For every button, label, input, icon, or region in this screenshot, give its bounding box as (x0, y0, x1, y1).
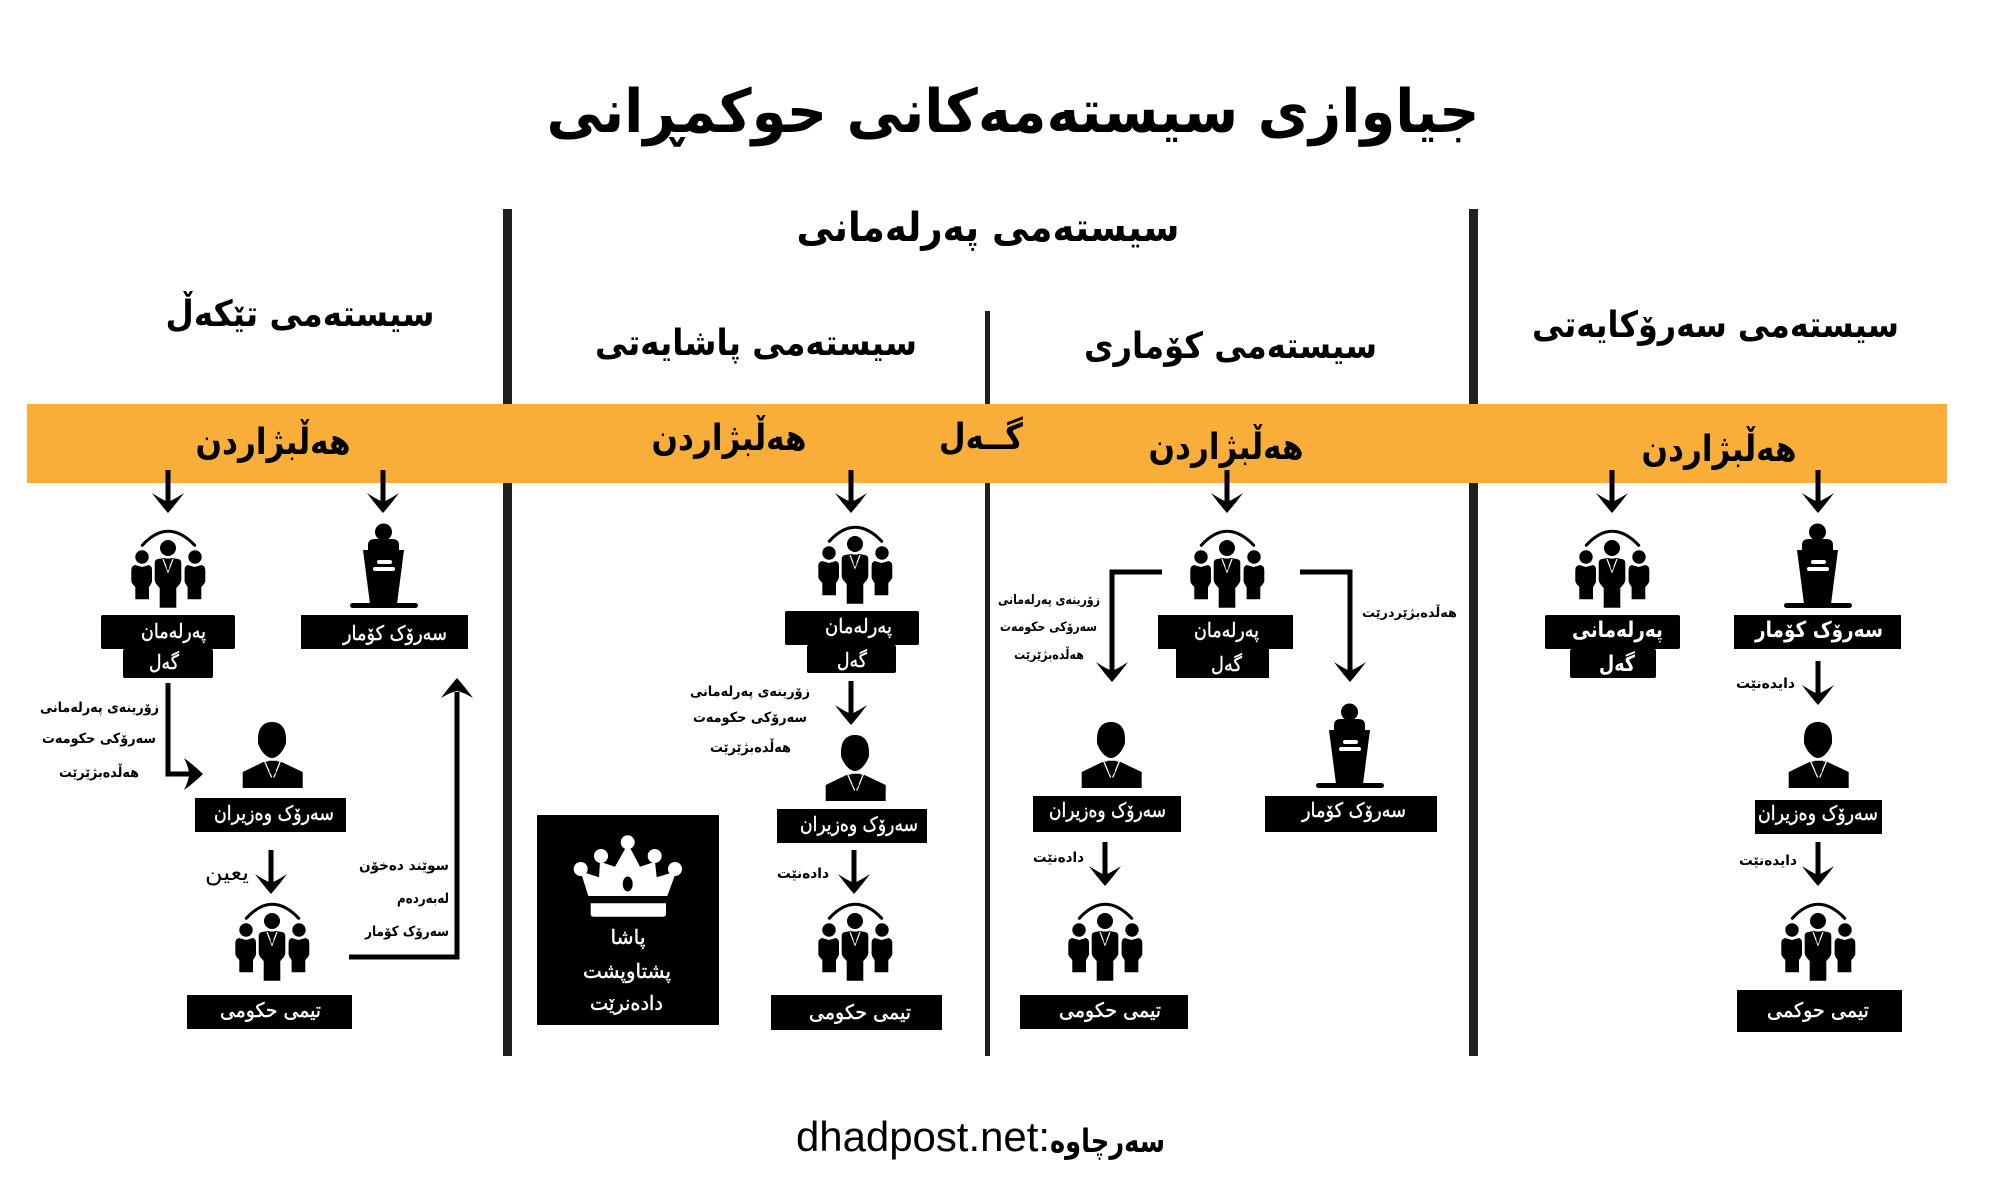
arrow: to president (1802, 470, 1834, 513)
arrow: prime minister to team (1802, 842, 1834, 886)
note: appoints: دایدەنێت (1736, 676, 1795, 692)
icon: government team (818, 904, 892, 981)
label box: parliament: گەل (1211, 652, 1242, 676)
heading: parliamentary system: سیستەمی پەرلەمانی (796, 205, 1180, 251)
panel: monarchy system (537, 323, 942, 1030)
icon: president at podium (1784, 524, 1852, 608)
note: majority elects prime minister: هەڵدەبژێرێت (710, 738, 791, 756)
king text: دادەنرێت (590, 991, 663, 1015)
note: majority elects prime minister (40, 700, 159, 781)
note: majority elects prime minister (690, 684, 810, 756)
band: people and elections (27, 404, 1947, 483)
arrow: to parliament (1596, 470, 1628, 513)
label box: parliament: پەرلەمانی (1572, 618, 1663, 643)
arrow: prime minister to team (838, 850, 870, 894)
source line: dhadpost.net: (796, 1113, 1050, 1160)
arrow: team to president (349, 678, 473, 957)
arrow: prime minister to team (255, 850, 287, 894)
note: majority elects prime minister (998, 593, 1100, 663)
icon: president at podium (350, 524, 418, 608)
icon: parliament (1575, 531, 1649, 608)
label box: parliament: گەل (1599, 650, 1635, 677)
icon: president at podium (1316, 704, 1384, 788)
label box: government team (187, 995, 352, 1029)
source line (796, 1113, 1165, 1160)
note: majority elects prime minister: سەرۆکی حکومەت (1000, 620, 1097, 635)
arrow: to parliament (835, 470, 867, 513)
label box: parliament: گەل (837, 648, 867, 672)
panel: presidential system (1532, 305, 1902, 1032)
panel: king box (537, 815, 719, 1025)
arrow: parliament to president (1300, 572, 1366, 682)
icon: parliament (131, 531, 205, 608)
label box: government team (771, 995, 942, 1030)
icon: prime minister (1789, 722, 1849, 788)
note: oath before president: سوێند دەخۆن (359, 858, 449, 874)
king text: پاشا (610, 925, 646, 950)
source line: سەرچاوە (1050, 1122, 1165, 1160)
label box: prime minister: سەرۆک وەزیران (214, 801, 334, 825)
note: majority elects prime minister: سەرۆکی حکومەت (693, 710, 807, 726)
label box: government team: تیمی حکومی (1059, 998, 1161, 1022)
panel: mixed system (40, 291, 473, 1029)
label box: parliament: پەرلەمان (141, 619, 206, 644)
king text (583, 925, 671, 1015)
label box: prime minister: سەرۆک وەزیران (1049, 798, 1166, 822)
arrow: to parliament (152, 470, 184, 513)
note: oath before president (359, 858, 449, 940)
election label: monarchy: هەڵبژاردن (652, 415, 806, 459)
note: appoints: دایدەنێت (1739, 853, 1797, 869)
label box: prime minister (1755, 800, 1882, 834)
king text: پشتاوپشت (583, 959, 671, 984)
label box: parliament: گەل (149, 650, 179, 674)
icon: crown (574, 835, 682, 917)
icon: parliament (818, 527, 892, 604)
label box: parliament: پەرلەمان (1194, 618, 1259, 643)
label box: president: سەرۆک کۆمار (1754, 618, 1883, 643)
icon: prime minister (1082, 722, 1142, 788)
arrow: parliament to prime minister (835, 681, 867, 725)
label box: parliament (101, 615, 235, 678)
note: majority elects prime minister: هەڵدەبژێرێت (59, 763, 139, 781)
label box: government team (1020, 995, 1188, 1029)
people label: گــەل (939, 416, 1023, 458)
label box: parliament (1158, 615, 1293, 678)
icon: prime minister (826, 735, 886, 801)
icon: government team (1781, 904, 1855, 981)
label box: president (1734, 615, 1901, 649)
label box: prime minister: سەرۆک وەزیران (800, 812, 918, 836)
icon: government team (235, 904, 309, 981)
heading: monarchy system: سیستەمی پاشایەتی (595, 323, 917, 364)
label box: parliament: پەرلەمان (825, 614, 892, 639)
election label: mixed: هەڵبژاردن (196, 419, 350, 463)
arrow: prime minister to team (1089, 842, 1121, 886)
arrow: to parliament (1211, 470, 1243, 513)
heading: republic system: سیستەمی کۆماری (1084, 326, 1377, 367)
label box: prime minister (777, 809, 927, 843)
note: oath before president: سەرۆک کۆمار (364, 924, 449, 940)
election label: republic: هەڵبژاردن (1148, 424, 1304, 468)
note: appoints: دادەنێت (777, 866, 829, 882)
label box: president (1265, 796, 1437, 832)
label box: president (301, 615, 468, 649)
note: oath before president: لەبەردەم (397, 891, 449, 907)
label box: government team: تیمی حکومی (220, 998, 321, 1022)
note: appoints: یعین (205, 861, 249, 886)
arrow: president to prime minister (1802, 661, 1834, 705)
label box: prime minister: سەرۆک وەزیران (1758, 801, 1878, 825)
note: majority elects prime minister: زۆرینەی پەرلەمانی (40, 700, 159, 716)
note: majority elects prime minister: زۆرینەی پەرلەمانی (998, 593, 1100, 608)
label box: government team: تیمی حکومی (809, 1000, 911, 1024)
note: appoints: دادەنێت (1033, 850, 1084, 866)
note: is elected: هەڵدەبژێردرێت (1362, 604, 1457, 621)
note: majority elects prime minister: هەڵدەبژێرێت (1014, 646, 1084, 663)
label box: prime minister (195, 798, 346, 832)
title: جیاوازی سیستەمەکانی حوکمڕانی (546, 77, 1480, 147)
label box: parliament (1545, 615, 1680, 678)
icon: prime minister (243, 722, 303, 788)
arrow: parliament to prime minister (168, 683, 203, 790)
label box: government team (1737, 990, 1902, 1032)
arrow: to president (367, 470, 399, 513)
note: majority elects prime minister: زۆرینەی پەرلەمانی (690, 684, 810, 700)
note: majority elects prime minister: سەرۆکی حکومەت (42, 731, 156, 747)
icon: parliament (1190, 531, 1264, 608)
panel: republic system (998, 326, 1457, 1029)
heading: presidential system: سیستەمی سەرۆکایەتی (1532, 305, 1899, 346)
election label: presidential: هەڵبژاردن (1642, 426, 1796, 470)
label box: government team: تیمی حوکمی (1767, 998, 1869, 1022)
label box: president: سەرۆک کۆمار (342, 621, 447, 645)
label box: parliament (785, 611, 919, 673)
label box: prime minister (1033, 796, 1181, 832)
arrow: parliament to prime minister (1096, 572, 1162, 682)
heading: mixed system: سیستەمی تێکەڵ (166, 291, 434, 335)
icon: government team (1068, 904, 1142, 981)
label box: president: سەرۆک کۆمار (1301, 798, 1406, 822)
